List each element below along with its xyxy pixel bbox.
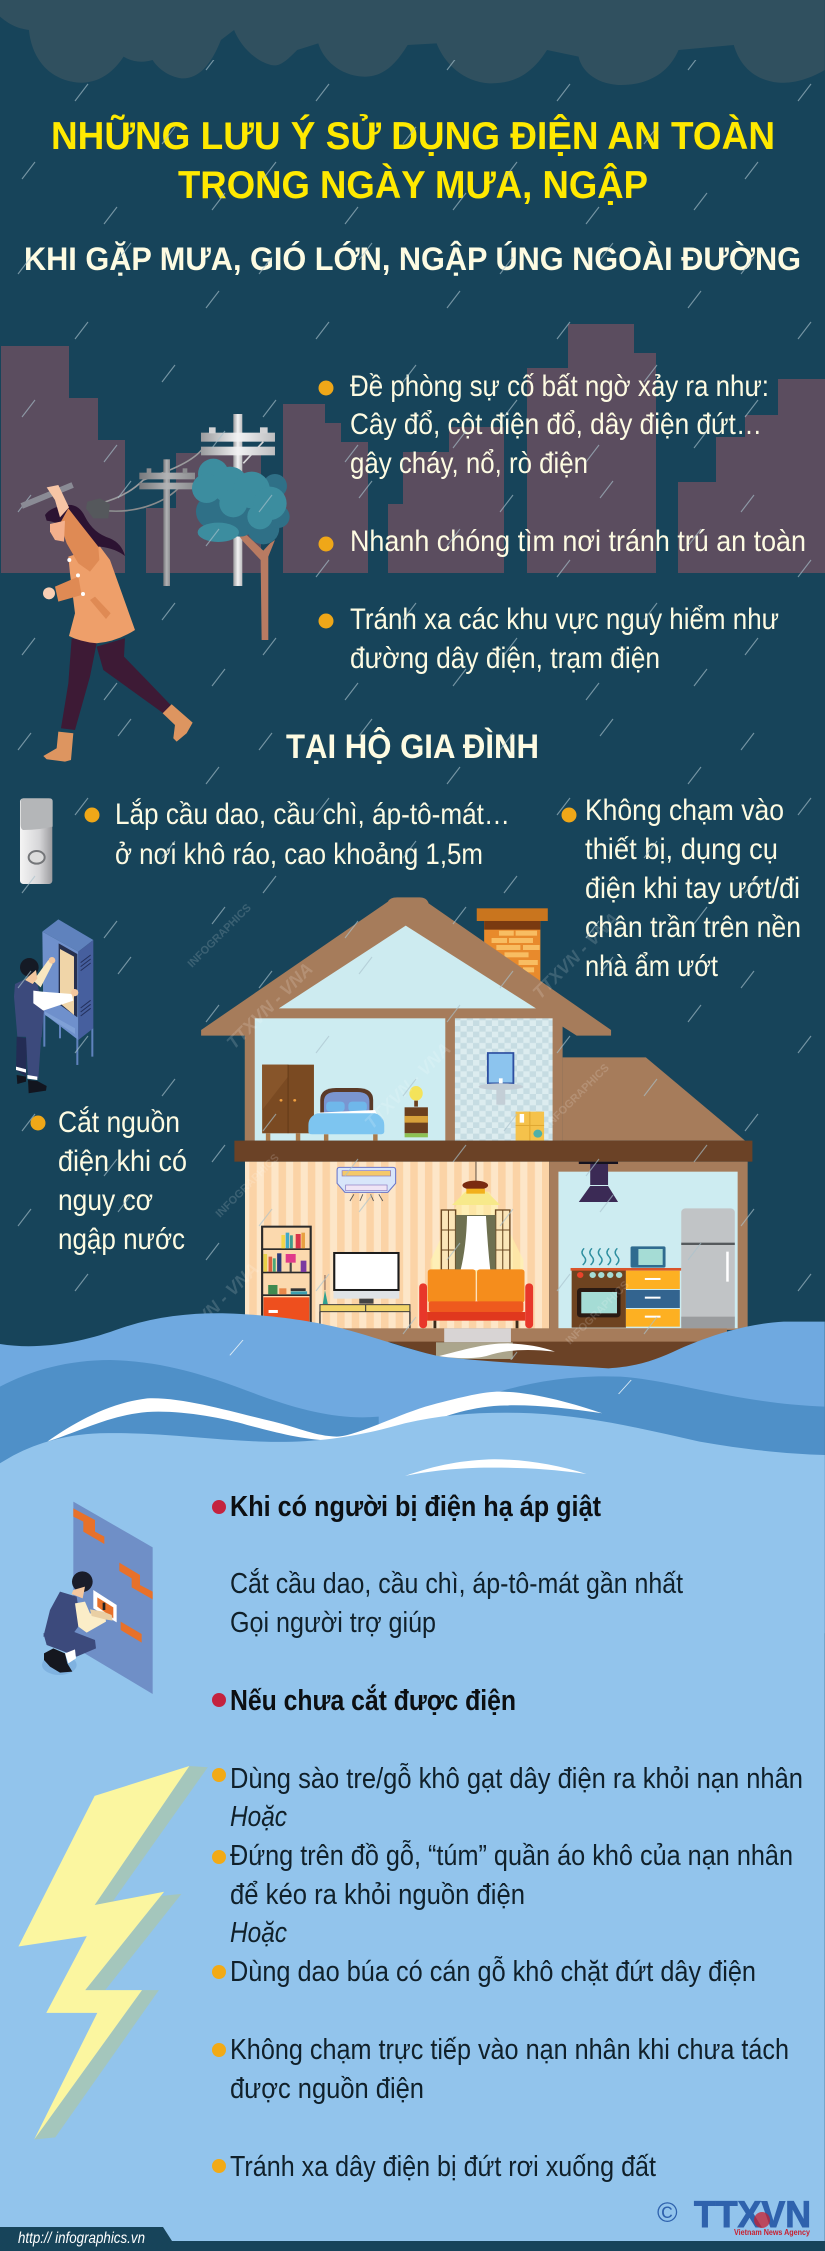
chimney bbox=[477, 908, 548, 984]
illustration: wind-blown tree bbox=[192, 459, 290, 640]
rescue advice list: để kéo ra khỏi nguồn điện bbox=[230, 1879, 525, 1911]
home advice: do not touch with wet hands: điện khi tay ướt/đi bbox=[585, 872, 800, 905]
window with curtains bbox=[441, 1210, 510, 1270]
sofa bbox=[419, 1269, 533, 1328]
icon: circuit breaker switch bbox=[20, 798, 53, 884]
rescue advice list: được nguồn điện bbox=[230, 2073, 424, 2105]
home advice: breaker location: Lắp cầu dao, cầu chì, áp-tô-mát… bbox=[115, 798, 510, 831]
bathroom mirror and sink bbox=[479, 1053, 523, 1105]
icon: lightning bolt bbox=[18, 1766, 208, 2140]
outdoor advice list: Cây đổ, cột điện đổ, dây điện đứt… bbox=[350, 408, 762, 441]
home advice: cut power: nguy cơ bbox=[58, 1184, 153, 1217]
watermarks: TTXVN - VNA bbox=[361, 1039, 455, 1133]
watermarks: INFOGRAPHICS bbox=[564, 1279, 632, 1347]
home advice: do not touch with wet hands: chân trần trên nền bbox=[585, 911, 801, 944]
title bbox=[51, 114, 775, 207]
house floor and foundation bbox=[327, 1328, 727, 1380]
rescue advice list: Tránh xa dây điện bị đứt rơi xuống đất bbox=[230, 2151, 656, 2183]
home advice: cut power: điện khi có bbox=[58, 1145, 187, 1178]
heading: at home: TẠI HỘ GIA ĐÌNH bbox=[286, 727, 539, 766]
title: TRONG NGÀY MƯA, NGẬP bbox=[178, 163, 648, 207]
illustration: house upper floor bbox=[201, 897, 752, 1162]
illustration: woman in rain holding stick bbox=[22, 485, 193, 762]
watermarks bbox=[169, 902, 632, 1353]
home advice: cut power: ngập nước bbox=[58, 1223, 185, 1256]
watermarks: TTXVN - VNA bbox=[529, 909, 623, 1003]
home advice: do not touch with wet hands bbox=[562, 794, 801, 983]
home advice: do not touch with wet hands: nhà ẩm ướt bbox=[585, 950, 719, 983]
footer bar: http:// infographics.vn bbox=[18, 2230, 145, 2247]
home advice: breaker location: ở nơi khô ráo, cao khoảng 1,5m bbox=[115, 838, 483, 871]
air conditioner bbox=[337, 1167, 396, 1201]
home advice: cut power bbox=[30, 1106, 187, 1256]
watermarks: INFOGRAPHICS bbox=[214, 1152, 282, 1220]
illustration: house ground floor bbox=[245, 1162, 748, 1380]
nightstand and lamp bbox=[405, 1086, 428, 1137]
TTXVN logo: TTXVN bbox=[694, 2194, 811, 2235]
kitchen stove and drawers bbox=[571, 1246, 681, 1328]
TTXVN logo: © bbox=[657, 2197, 678, 2228]
illustration: man at electrical cabinet bbox=[14, 919, 93, 1093]
home advice: cut power: Cắt nguồn bbox=[58, 1106, 180, 1139]
outdoor advice list: gây cháy, nổ, rò điện bbox=[350, 447, 588, 480]
heading: if power cannot be cut: Nếu chưa cắt được điện bbox=[230, 1683, 516, 1717]
refrigerator bbox=[681, 1208, 735, 1328]
rescue advice list: Hoặc bbox=[230, 1917, 287, 1949]
bed bbox=[308, 1088, 384, 1141]
first aid steps: Gọi người trợ giúp bbox=[230, 1607, 436, 1639]
flood water waves bbox=[0, 1313, 825, 2251]
outdoor advice list: đường dây điện, trạm điện bbox=[350, 642, 660, 675]
home advice: do not touch with wet hands: Không chạm vào bbox=[585, 794, 784, 827]
watermarks: INFOGRAPHICS bbox=[544, 1062, 612, 1130]
watermarks: INFOGRAPHICS bbox=[186, 902, 254, 970]
illustration: man kneeling at fuse box bbox=[42, 1502, 153, 1694]
pendant lamp with light bbox=[431, 1162, 523, 1280]
rescue advice list: Dùng dao búa có cán gỗ khô chặt đứt dây điện bbox=[230, 1955, 756, 1988]
wardrobe bbox=[262, 1065, 314, 1141]
illustration: electric poles and wires bbox=[86, 414, 275, 586]
home advice: breaker location bbox=[84, 798, 510, 871]
rescue advice list bbox=[212, 1762, 803, 2183]
storm clouds bbox=[0, 0, 825, 85]
outdoor advice list: Đề phòng sự cố bất ngờ xảy ra như: bbox=[350, 370, 769, 403]
TTXVN logo: Vietnam News Agency bbox=[734, 2227, 810, 2237]
kitchen hood bbox=[579, 1162, 618, 1202]
watermarks: TTXVN - VNA bbox=[169, 1259, 263, 1353]
title: NHỮNG LƯU Ý SỬ DỤNG ĐIỆN AN TOÀN bbox=[51, 114, 775, 158]
home advice: do not touch with wet hands: thiết bị, dụng cụ bbox=[585, 833, 778, 866]
watermarks: TTXVN - VNA bbox=[223, 959, 317, 1053]
footer bar bbox=[0, 2227, 825, 2251]
panel: first aid heading: Khi có người bị điện hạ áp giật bbox=[230, 1491, 601, 1523]
TV and console bbox=[319, 1253, 411, 1328]
rain bbox=[0, 60, 825, 1360]
background buildings bbox=[1, 324, 825, 573]
first aid steps: Cắt cầu dao, cầu chì, áp-tô-mát gần nhất bbox=[230, 1567, 683, 1600]
outdoor advice list bbox=[318, 370, 806, 675]
first aid steps bbox=[230, 1567, 683, 1639]
heading: outdoors: KHI GẶP MƯA, GIÓ LỚN, NGẬP ÚNG NGOÀI ĐƯỜNG bbox=[24, 240, 801, 277]
bookshelf bbox=[262, 1227, 311, 1323]
storage box bbox=[516, 1112, 544, 1141]
rescue advice list: Hoặc bbox=[230, 1801, 287, 1833]
